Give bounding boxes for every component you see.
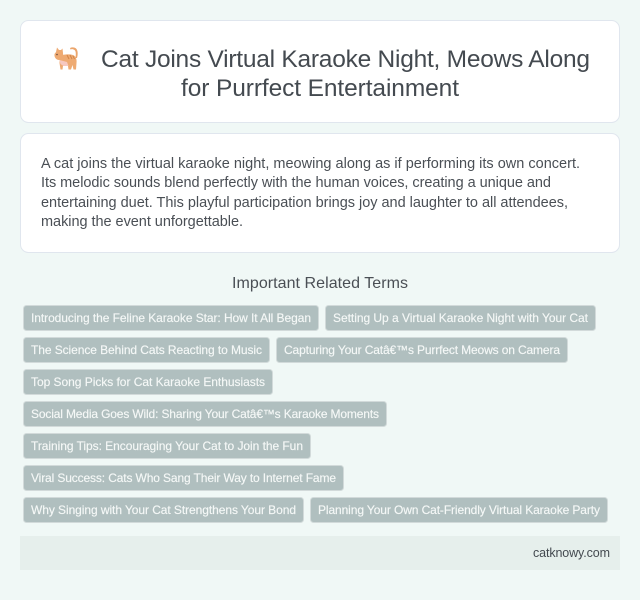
description text: entertaining duet. This playful participation brings joy and laughter to all attendees, xyxy=(41,195,568,211)
tag 2: Setting Up a Virtual Karaoke Night with Your Cat xyxy=(333,311,589,325)
related term tags xyxy=(24,306,608,522)
tag 5: Top Song Picks for Cat Karaoke Enthusiasts xyxy=(31,375,265,389)
tag 10: Planning Your Own Cat-Friendly Virtual Karaoke Party xyxy=(318,503,600,517)
description text: making the event unforgettable. xyxy=(41,214,243,230)
footer source text: catknowy.com xyxy=(533,546,610,560)
tag 6 xyxy=(24,402,386,426)
tag 10 xyxy=(310,498,608,522)
description text: A cat joins the virtual karaoke night, meowing along as if performing its own concert. xyxy=(41,156,580,172)
description text: Its melodic sounds blend perfectly with the human voices, creating a unique and xyxy=(41,175,551,191)
tag 3 xyxy=(24,338,270,362)
tag 3: The Science Behind Cats Reacting to Music xyxy=(31,343,262,357)
description text xyxy=(41,156,580,230)
tag 6: Social Media Goes Wild: Sharing Your Catâ€™s Karaoke Moments xyxy=(31,407,379,421)
tag 7 xyxy=(24,434,310,458)
tag 2 xyxy=(326,306,596,330)
footer xyxy=(20,536,620,570)
panel: description xyxy=(20,134,620,252)
tag 1: Introducing the Feline Karaoke Star: How It All Began xyxy=(31,311,311,325)
title text xyxy=(101,46,590,102)
tag 1 xyxy=(24,306,318,330)
tag 7: Training Tips: Encouraging Your Cat to Join the Fun xyxy=(31,439,303,453)
tag 9: Why Singing with Your Cat Strengthens Your Bond xyxy=(31,503,296,517)
tag 8 xyxy=(24,466,344,490)
icon: cat xyxy=(54,47,78,70)
panel: title xyxy=(20,20,620,122)
tag 8: Viral Success: Cats Who Sang Their Way to Internet Fame xyxy=(31,471,336,485)
tag 5 xyxy=(24,370,272,394)
title text: Cat Joins Virtual Karaoke Night, Meows Along xyxy=(101,46,590,73)
heading: important related terms: Important Related Terms xyxy=(232,275,408,292)
tag 4 xyxy=(276,338,568,362)
title text: for Purrfect Entertainment xyxy=(181,75,459,102)
tag 4: Capturing Your Catâ€™s Purrfect Meows on Camera xyxy=(284,343,560,357)
tag 9 xyxy=(24,498,304,522)
